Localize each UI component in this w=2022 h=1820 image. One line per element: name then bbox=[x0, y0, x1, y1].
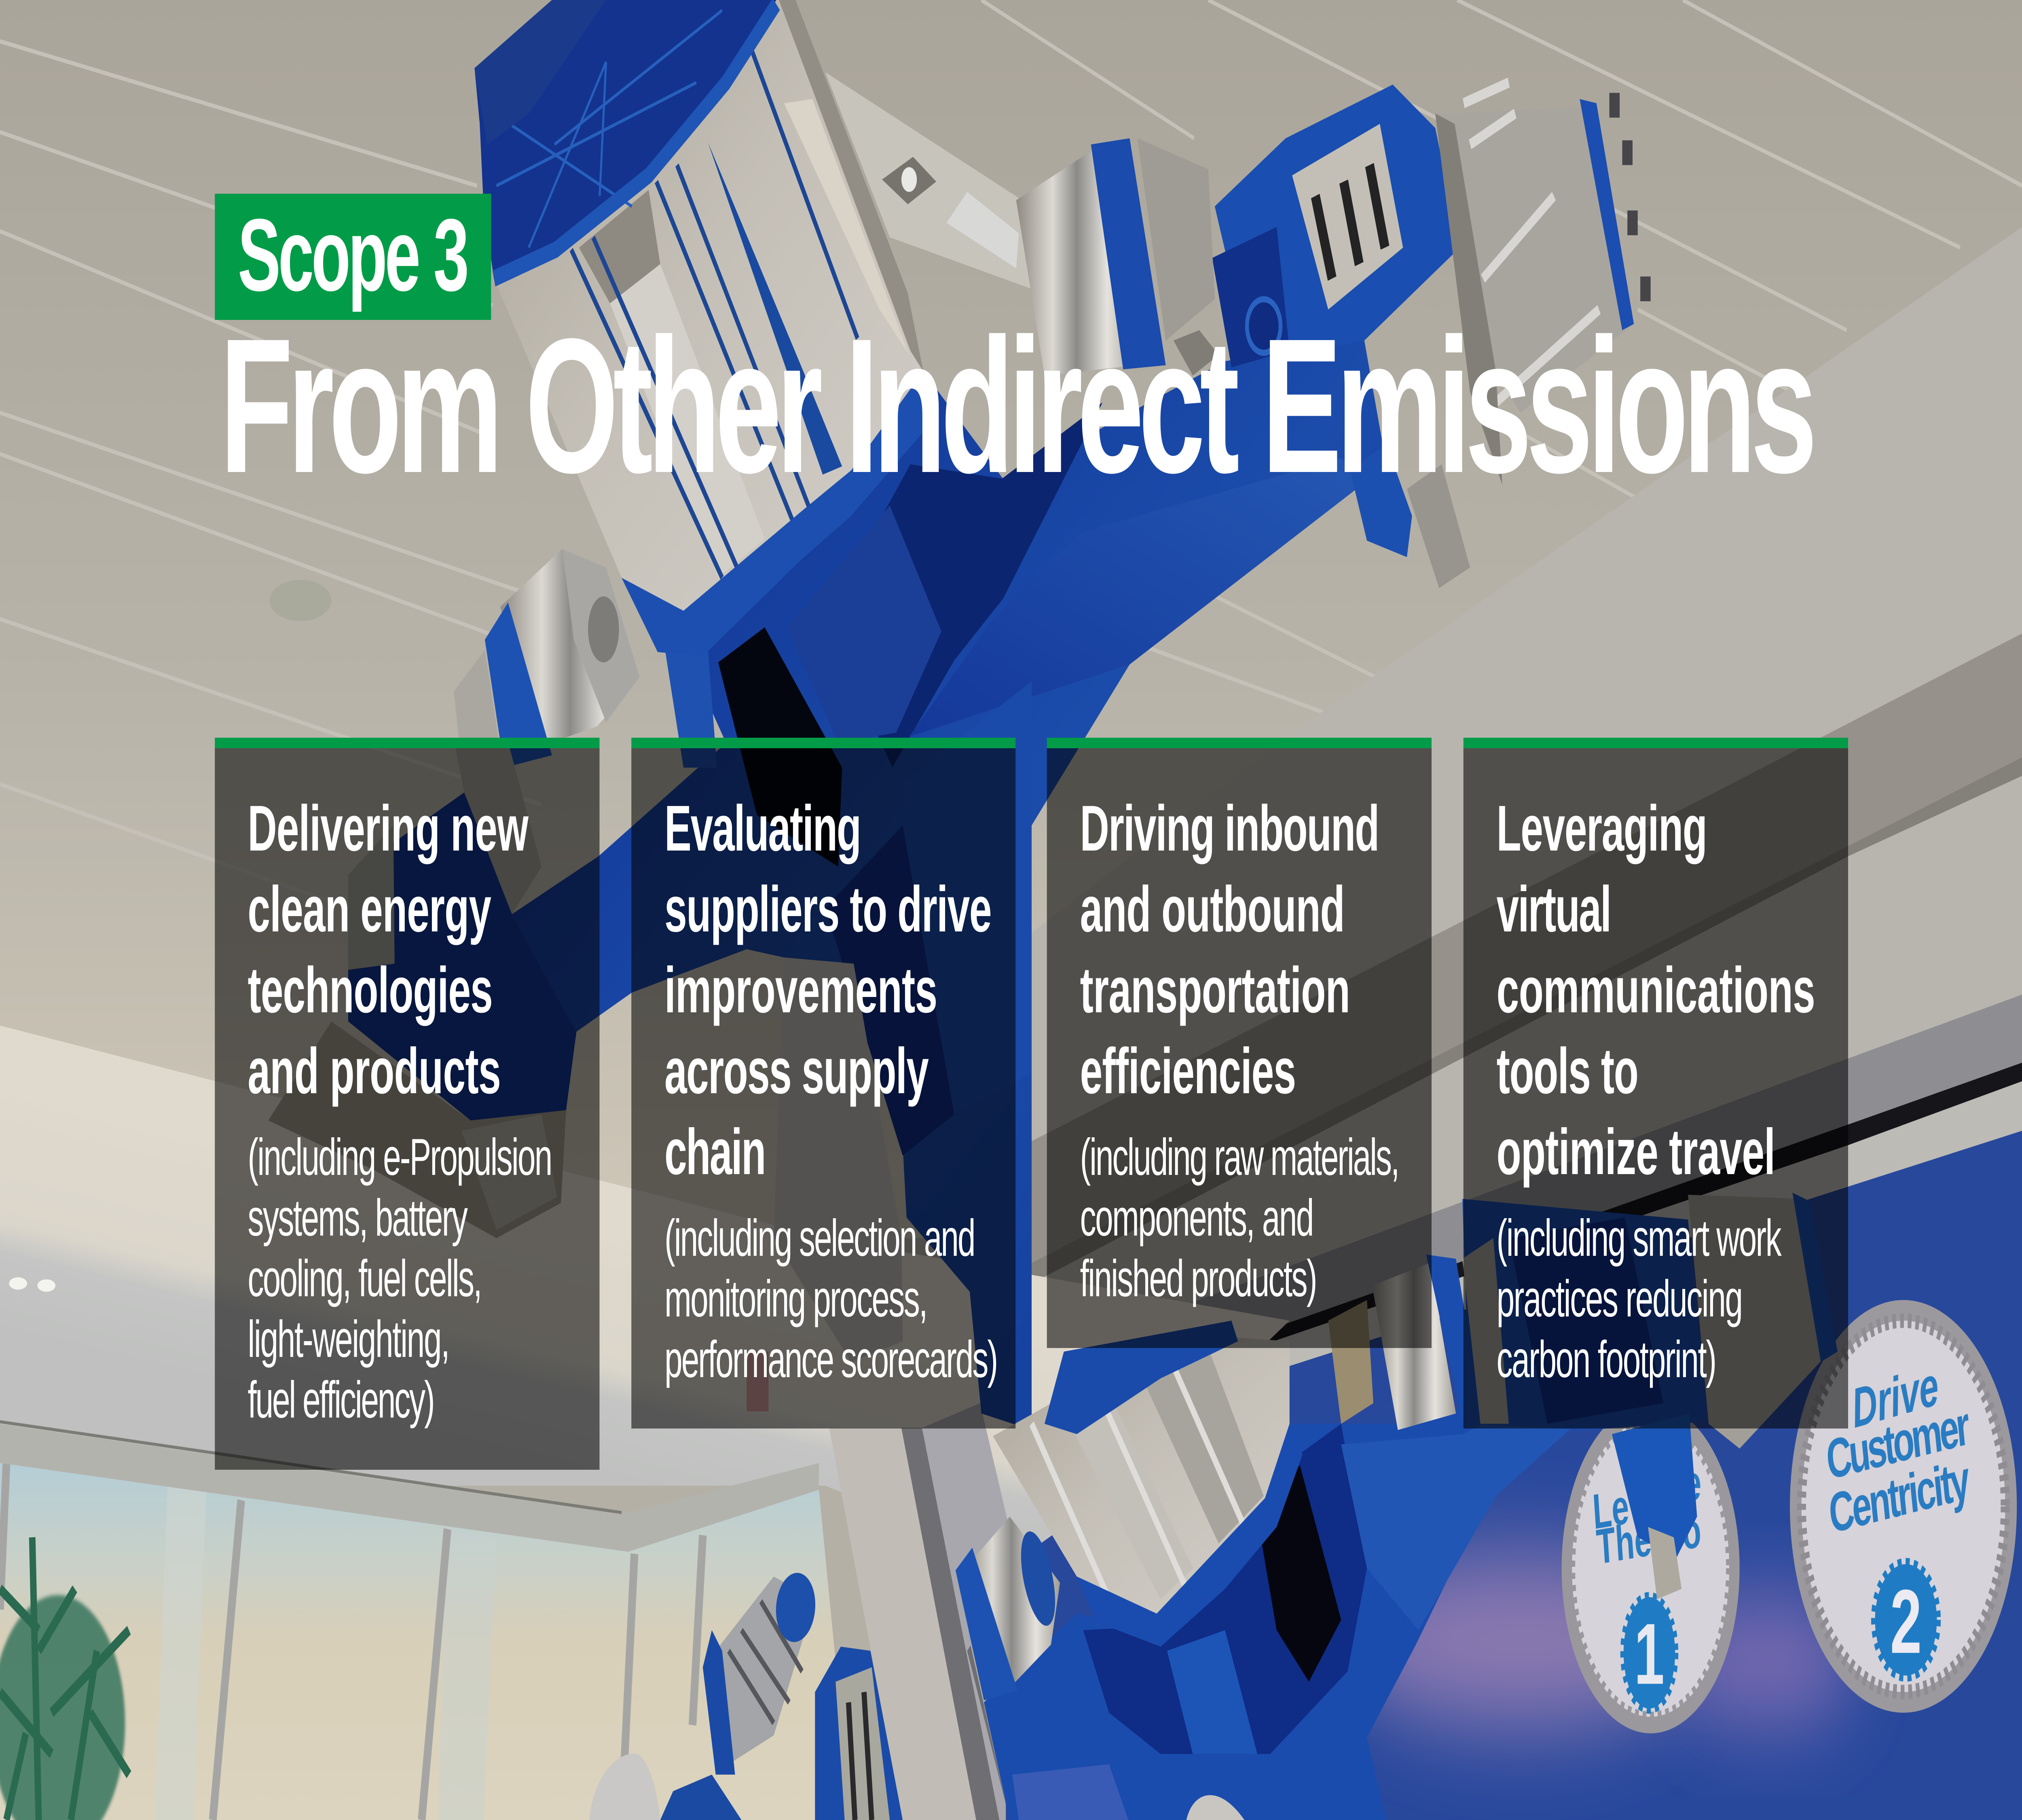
text block: e-propulsion details: light-weighting, bbox=[247, 1310, 450, 1368]
text block: raw materials details: finished products) bbox=[1080, 1249, 1317, 1308]
text block: selection and monitoring details: (including selection and bbox=[664, 1209, 975, 1267]
text block: raw materials details: (including raw materials, bbox=[1080, 1128, 1400, 1186]
robot: upper motor housing bbox=[494, 0, 923, 611]
heading: leveraging virtual communications tools to optimize travel: Leveraging bbox=[1497, 792, 1707, 865]
robot: upper gearbox hub bbox=[1212, 85, 1460, 367]
gear badge 1: The Co bbox=[1595, 1502, 1703, 1575]
robot: lower silver motor bbox=[993, 1321, 1303, 1646]
text block: e-propulsion details: fuel efficiency) bbox=[247, 1371, 435, 1429]
text block: raw materials details bbox=[1080, 1128, 1400, 1308]
heading: driving inbound and outbound transportation efficiencies: and outbound bbox=[1080, 873, 1345, 946]
gear badge 1: Le bbox=[1591, 1479, 1631, 1540]
windows bbox=[0, 1422, 851, 1820]
left wall, soffit and beam bbox=[0, 1026, 1290, 1568]
text block: raw materials details: components, and bbox=[1080, 1189, 1314, 1247]
robot: gray column behind bbox=[774, 957, 903, 1362]
text block: selection and monitoring details bbox=[664, 1209, 998, 1388]
text block: smart work details: (including smart work bbox=[1497, 1209, 1782, 1267]
gear badge 2 bbox=[1790, 1300, 2017, 1713]
panel: driving transportation efficiencies bbox=[1047, 738, 1432, 1348]
heading: driving inbound and outbound transportation efficiencies bbox=[1080, 792, 1379, 1107]
plant bbox=[0, 1537, 129, 1820]
robot: lower main arm bbox=[984, 1382, 1599, 1820]
robot: upper right rotor with rods bbox=[1350, 83, 1651, 588]
robot: lower flange of upper motor bbox=[622, 371, 931, 656]
white post bbox=[829, 1403, 1019, 1820]
panel: leveraging virtual communications bbox=[1464, 738, 1848, 1428]
text block: e-propulsion details: systems, battery bbox=[247, 1189, 468, 1247]
gear badge 2: Drive bbox=[1849, 1354, 1942, 1440]
heading: evaluating suppliers to drive improvements across supply chain: suppliers to drive bbox=[664, 873, 992, 946]
text block: selection and monitoring details: performance scorecards) bbox=[664, 1330, 998, 1388]
robot: main body and arm bbox=[512, 341, 1386, 1430]
heading: delivering new clean energy technologies and products bbox=[247, 792, 529, 1107]
robot: motor end cap bbox=[474, 0, 776, 279]
text block: e-propulsion details: cooling, fuel cells, bbox=[247, 1249, 482, 1308]
robot: lower small chrome cylinder bbox=[956, 1517, 1062, 1700]
text block: selection and monitoring details: monitoring process, bbox=[664, 1270, 928, 1328]
heading: leveraging virtual communications tools to optimize travel: tools to bbox=[1497, 1035, 1639, 1107]
heading: evaluating suppliers to drive improvements across supply chain: across supply bbox=[664, 1035, 929, 1107]
robot: lower left housing in card 1 bbox=[268, 747, 576, 1238]
heading: leveraging virtual communications tools to optimize travel: virtual bbox=[1497, 873, 1612, 946]
gear badge 1: e bbox=[1684, 1456, 1701, 1511]
heading: leveraging virtual communications tools to optimize travel bbox=[1497, 792, 1815, 1188]
heading: delivering new clean energy technologies and products: Delivering new bbox=[247, 792, 529, 865]
text block: e-propulsion details: (including e-Propulsion bbox=[247, 1128, 552, 1186]
heading: driving inbound and outbound transportation efficiencies: transportation bbox=[1080, 954, 1350, 1026]
gear badge 1 bbox=[1562, 1403, 1740, 1733]
heading: delivering new clean energy technologies and products: clean energy bbox=[247, 873, 491, 946]
robot: upper left motor bbox=[454, 549, 640, 768]
banner with gradient bands bbox=[1006, 1131, 2022, 1820]
text block: smart work details bbox=[1497, 1209, 1782, 1388]
text block: smart work details: carbon footprint) bbox=[1497, 1330, 1717, 1388]
heading: evaluating suppliers to drive improvements across supply chain: improvements bbox=[664, 954, 937, 1026]
lower left motors bbox=[589, 1564, 903, 1820]
ceiling light fittings bbox=[269, 72, 1218, 621]
heading: evaluating suppliers to drive improvements across supply chain: chain bbox=[664, 1116, 766, 1188]
heading: driving inbound and outbound transportation efficiencies: efficiencies bbox=[1080, 1035, 1296, 1107]
text block: smart work details: practices reducing bbox=[1497, 1270, 1743, 1328]
gear badge 2: Customer bbox=[1824, 1394, 1972, 1492]
title: From Other Indirect Emissions bbox=[220, 298, 1817, 513]
text block: e-propulsion details bbox=[247, 1128, 552, 1429]
heading: leveraging virtual communications tools to optimize travel: optimize travel bbox=[1497, 1116, 1775, 1188]
robot: right gear assembly bbox=[1328, 1193, 1838, 1599]
panel: delivering new clean energy technologies bbox=[215, 738, 599, 1470]
heading: delivering new clean energy technologies and products: and products bbox=[247, 1035, 501, 1107]
ceiling bbox=[0, 0, 2022, 1238]
gear badge 2: 2 bbox=[1890, 1571, 1922, 1672]
heading: evaluating suppliers to drive improvements across supply chain bbox=[664, 792, 992, 1188]
heading: driving inbound and outbound transportation efficiencies: Driving inbound bbox=[1080, 792, 1379, 865]
panel: evaluating suppliers bbox=[631, 738, 1015, 1428]
exit sign bbox=[747, 1352, 769, 1412]
heading: delivering new clean energy technologies and products: technologies bbox=[247, 954, 493, 1026]
scope tag: Scope 3 bbox=[238, 197, 469, 312]
heading: evaluating suppliers to drive improvements across supply chain: Evaluating bbox=[664, 792, 861, 865]
gear badge 1: 1 bbox=[1634, 1605, 1665, 1702]
heading: leveraging virtual communications tools to optimize travel: communications bbox=[1497, 954, 1815, 1026]
right wall and bands bbox=[903, 227, 2022, 1486]
robot: upper left chrome cylinder bbox=[1016, 138, 1215, 376]
gear badge 2: Centricity bbox=[1826, 1448, 1973, 1545]
